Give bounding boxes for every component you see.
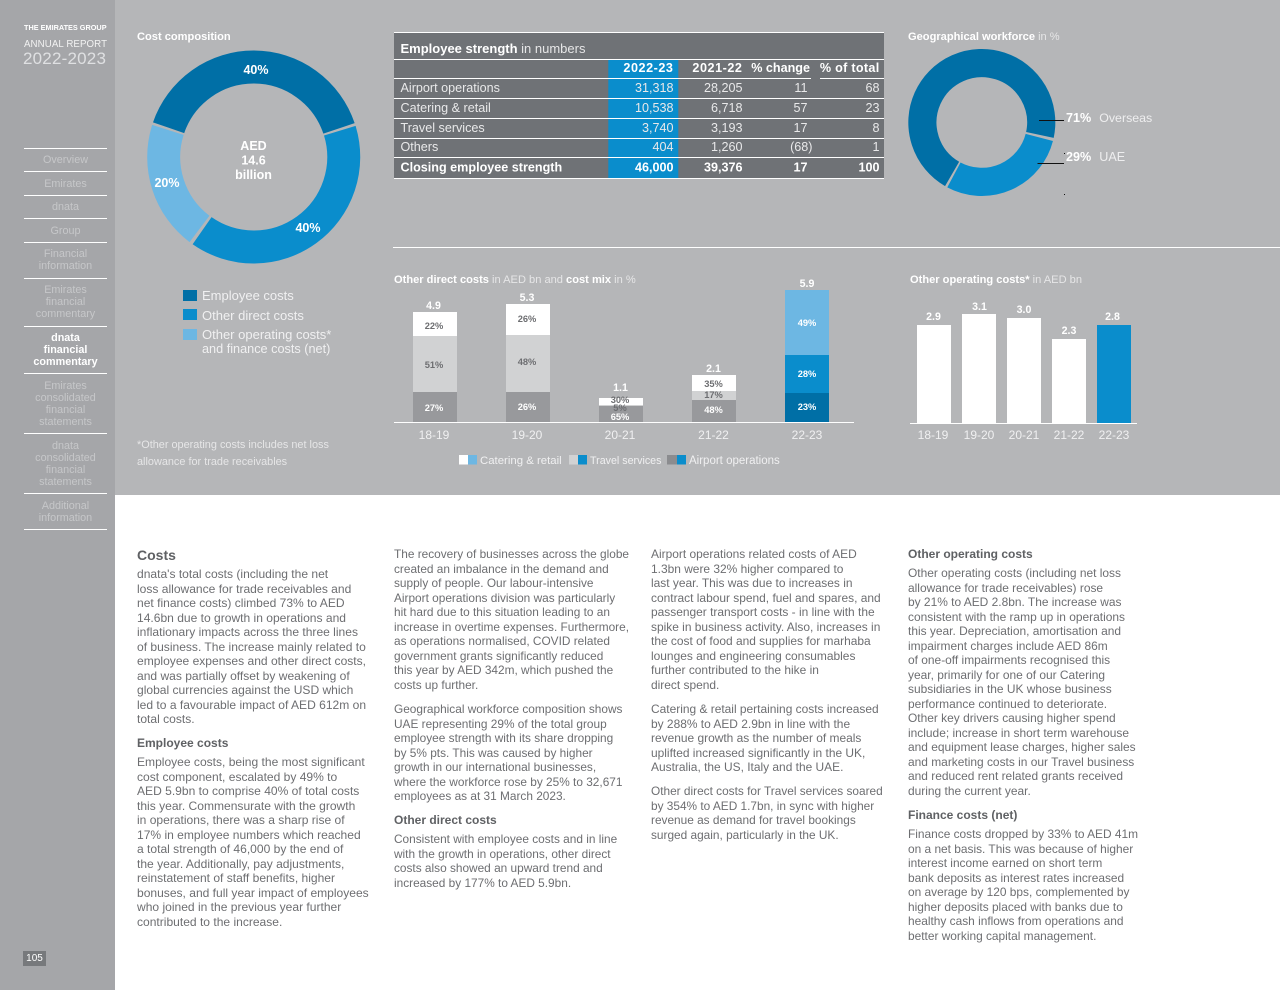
text: costs overview — [137, 567, 366, 726]
text: recovery of businesses: hit hard due to this situation leading to an — [394, 605, 610, 619]
nav: additional information: information — [39, 512, 92, 524]
bar 20-21 — [599, 382, 643, 422]
text: other operating costs: include; increase in short term warehouse — [908, 726, 1129, 740]
text: employee costs: in operations, there was a sharp rise of — [137, 813, 345, 827]
text: other operating costs: and reduced rent related grants received — [908, 769, 1123, 783]
nav: dnata consolidated financial statements — [35, 440, 96, 488]
cost composition donut: 40% — [295, 221, 321, 235]
bar 22-23: 28% — [798, 369, 817, 379]
page number — [23, 951, 46, 966]
x axis labels: 19-20 — [512, 428, 543, 442]
text: travel services costs: revenue as demand for travel bookings — [651, 813, 856, 827]
table row: others: Others — [400, 140, 438, 154]
table row: others: 1,260 — [711, 140, 742, 154]
text: recovery of businesses: Airport operations division was particularly — [394, 590, 615, 604]
text: other operating costs: Other key drivers causing higher spend — [908, 711, 1116, 725]
nav: dnata financial commentary (active): financial — [44, 344, 87, 356]
heading: cost composition: Cost composition — [137, 31, 231, 43]
nav: emirates consolidated financial statements — [35, 380, 96, 428]
table row: closing employee strength: 100 — [858, 160, 880, 174]
table row: travel services — [400, 121, 880, 135]
text: catering and retail costs — [651, 702, 879, 774]
nav: dnata consolidated financial statements: consolidated — [35, 452, 96, 464]
text: costs overview: of business. The increase mainly related to — [137, 640, 366, 654]
sidebar — [0, 0, 115, 990]
text: employee costs: this year. Commensurate with the growth — [137, 798, 355, 812]
heading: costs: Costs — [137, 547, 176, 563]
nav: emirates financial commentary — [36, 284, 95, 320]
table row: others: (68) — [790, 140, 812, 154]
text: recovery of businesses: as operations normalised, COVID related — [394, 634, 610, 648]
text: costs overview: 14.6bn due to growth in operations and — [137, 610, 346, 624]
bar chart legend: Travel services — [590, 455, 661, 467]
other operating costs bar chart — [910, 274, 1137, 442]
text: employee costs: reinstatement of staff benefits, higher — [137, 871, 335, 885]
cost composition donut: 40% — [243, 63, 269, 77]
text: employee costs: the year. Additionally, pay adjustments, — [137, 856, 344, 870]
heading: other operating costs: Other operating costs* in AED bn — [910, 274, 1082, 286]
table row: airport operations: 31,318 — [635, 81, 674, 95]
table row: airport operations: 11 — [794, 81, 808, 95]
table header row: 2022-23 — [623, 61, 674, 75]
text: other operating costs: and equipment lease charges, higher sales — [908, 740, 1136, 754]
text: employee costs: Employee costs, being the most significant — [137, 755, 365, 769]
bar 19-20 — [506, 292, 550, 422]
bar 21-22 — [692, 363, 736, 422]
text: airport operations costs: contract labour spend, fuel and spares, and — [651, 590, 881, 604]
text: geographical workforce composition: UAE representing 29% of the total group — [394, 716, 607, 730]
nav: dnata financial commentary (active) — [33, 332, 98, 368]
nav: dnata: dnata — [52, 201, 79, 213]
bar values: 3.0 — [1017, 304, 1031, 316]
text: geographical workforce composition: employee strength with its share dropping — [394, 731, 613, 745]
bar values: 3.1 — [972, 301, 987, 313]
text: geographical workforce composition: where the workforce rose by 25% to 32,671 — [394, 774, 622, 788]
heading: other direct costs: Other direct costs in AED bn and cost mix in % — [394, 274, 636, 286]
bar 20-21: 65% — [611, 412, 630, 422]
text: geographical workforce composition: growth in our international businesses, — [394, 760, 596, 774]
text: other operating costs: by 21% to AED 2.8bn. The increase was — [908, 595, 1121, 609]
text: other operating costs — [908, 566, 1136, 798]
table row: catering and retail: Catering & retail — [400, 101, 491, 115]
x axis labels — [419, 428, 823, 442]
table row: travel services: 17 — [793, 121, 808, 135]
cost composition legend: Other direct costs — [202, 308, 304, 323]
text: travel services costs: by 354% to AED 1.7bn, in sync with higher — [651, 798, 874, 812]
table row: travel services: 3,740 — [642, 121, 674, 135]
text: costs overview: inflationary impacts across the three lines — [137, 625, 358, 639]
heading: employee costs: Employee costs — [137, 736, 228, 750]
text: finance costs: bank deposits as interest rates increased — [908, 870, 1124, 884]
nav: overview: Overview — [43, 154, 88, 166]
text: costs overview: and was partially offset by weakening of — [137, 668, 350, 682]
text: costs overview: led to a favourable impact of AED 612m on — [137, 698, 366, 712]
table row: others: 1 — [872, 140, 880, 154]
text: catering and retail costs: by 288% to AED 2.9bn in line with the — [651, 716, 850, 730]
text: recovery of businesses: government grants significantly reduced — [394, 648, 603, 662]
text: costs overview: global currencies against the USD which — [137, 683, 353, 697]
cost composition donut — [137, 31, 344, 247]
text: travel services costs: Other direct costs for Travel services soared — [651, 784, 883, 798]
text: other operating costs: Other operating costs (including net loss — [908, 566, 1121, 580]
bar 18-19: 4.9 — [426, 300, 441, 312]
text: recovery of businesses: increase in overtime expenses. Furthermore, — [394, 620, 629, 634]
bar chart legend: Airport operations — [689, 455, 780, 467]
x axis labels — [918, 428, 1130, 442]
bar 18-19: 27% — [425, 403, 444, 413]
text: finance costs: better working capital management. — [908, 928, 1096, 942]
text: other direct costs: increased by 177% to AED 5.9bn. — [394, 876, 571, 890]
cost composition donut: 20% — [154, 176, 180, 190]
text: other operating costs: during the current year. — [908, 784, 1031, 798]
nav: dnata financial commentary (active): commentary — [33, 356, 98, 368]
text: costs overview: net finance costs) climbed 73% to AED — [137, 596, 345, 610]
nav: emirates financial commentary: commentary — [36, 308, 95, 320]
bar 18-19: 22% — [425, 321, 444, 331]
bar 19-20: 26% — [518, 314, 537, 324]
x axis labels: 18-19 — [419, 428, 450, 442]
text: costs overview: employee expenses and other direct costs, — [137, 654, 366, 668]
text: other operating costs: impairment charges include AED 86m — [908, 638, 1108, 652]
cost composition legend — [183, 288, 331, 356]
text: airport operations costs: lounges and engineering consumables — [651, 648, 855, 662]
text: other direct costs — [394, 832, 617, 890]
nav: group: Group — [50, 225, 80, 237]
text: finance costs: higher deposits placed with banks due to — [908, 900, 1123, 914]
navigation menu — [24, 148, 107, 530]
nav: financial information — [39, 248, 92, 272]
table row: closing employee strength — [400, 160, 880, 174]
text: other direct costs: Consistent with employee costs and in line — [394, 832, 617, 846]
text: airport operations costs: passenger transport costs - in line with the — [651, 605, 875, 619]
table row: catering and retail: 10,538 — [635, 101, 674, 115]
nav: emirates consolidated financial statements: statements — [39, 416, 92, 428]
text: catering and retail costs: Australia, the US, Italy and the UAE. — [651, 760, 843, 774]
table row: airport operations: 68 — [865, 81, 880, 95]
table row: travel services: Travel services — [400, 121, 485, 135]
heading: geographical workforce: Geographical workforce in % — [908, 31, 1060, 43]
table row: catering and retail — [400, 101, 880, 115]
bar values: 2.3 — [1062, 325, 1076, 337]
text: recovery of businesses: created an imbalance in the demand and — [394, 562, 609, 576]
text: finance costs: healthy cash inflows from operations and — [908, 914, 1123, 928]
geographical workforce donut — [908, 31, 1152, 195]
brand: annual report: ANNUAL REPORT — [24, 39, 107, 50]
cost composition legend: and finance costs (net) — [202, 342, 330, 356]
table header row: % of total — [820, 61, 880, 75]
charts panel — [115, 0, 1280, 495]
text: employee costs: who joined in the previous year further — [137, 900, 341, 914]
cost composition legend: Other operating costs* — [202, 327, 331, 342]
donut centre total: AED — [240, 139, 267, 153]
text: employee costs: cost component, escalated by 49% to — [137, 770, 337, 784]
nav: emirates: Emirates — [44, 178, 87, 190]
table header row: % change — [751, 61, 810, 75]
text: recovery of businesses: The recovery of businesses across the globe — [394, 547, 629, 561]
heading: finance costs: Finance costs (net) — [908, 808, 1017, 822]
nav: financial information: Financial — [44, 248, 87, 260]
heading: other operating costs: Other operating costs — [908, 547, 1033, 561]
text: other operating costs: performance continued to deteriorate. — [908, 696, 1107, 710]
bar 19-20: 5.3 — [520, 292, 534, 304]
bar 21-22: 17% — [704, 390, 724, 400]
bar 22-23 — [785, 278, 829, 422]
x axis labels: 20-21 — [605, 428, 636, 442]
text: finance costs: Finance costs dropped by 33% to AED 41m — [908, 827, 1138, 841]
text: employee costs: contributed to the increase. — [137, 914, 282, 928]
nav: emirates financial commentary: financial — [46, 296, 85, 308]
text: employee costs: 17% in employee numbers which reached — [137, 828, 361, 842]
text: airport operations costs: further contributed to the hike in — [651, 663, 819, 677]
text: finance costs: interest income earned on short term — [908, 856, 1102, 870]
text: other operating costs: of one-off impairments recognised this — [908, 653, 1110, 667]
table title: Employee strength in numbers — [400, 41, 586, 56]
bar 21-22: 2.1 — [706, 363, 721, 375]
other direct costs stacked bar chart — [394, 274, 854, 467]
nav: emirates consolidated financial statements: consolidated — [35, 392, 96, 404]
nav: dnata consolidated financial statements: financial — [46, 464, 85, 476]
employee strength table — [394, 32, 884, 179]
bar 22-23: 5.9 — [800, 278, 814, 290]
text: airport operations costs: last year. This was due to increases in — [651, 576, 852, 590]
text: geographical workforce composition: Geographical workforce composition shows — [394, 702, 622, 716]
bar 18-19 — [413, 300, 457, 422]
text: airport operations costs: 1.3bn were 32% higher compared to — [651, 562, 843, 576]
table row: airport operations: 28,205 — [704, 81, 742, 95]
table row: catering and retail: 6,718 — [711, 101, 742, 115]
table row: closing employee strength: 17 — [793, 160, 808, 174]
text: airport operations costs: direct spend. — [651, 678, 719, 692]
bar 21-22: 35% — [704, 379, 724, 389]
text: costs overview: dnata's total costs (including the net — [137, 567, 328, 581]
text: recovery of businesses: this year by AED 342m, which pushed the — [394, 663, 613, 677]
text: other operating costs: consistent with the ramp up in operations — [908, 610, 1125, 624]
donut centre total — [235, 139, 272, 182]
x axis labels: 20-21 — [1009, 428, 1040, 442]
brand: report years: 2022-2023 — [23, 49, 106, 68]
text: recovery of businesses: costs up further. — [394, 678, 478, 692]
text: geographical workforce composition — [394, 702, 622, 803]
footnote — [137, 439, 329, 468]
table row: travel services: 8 — [872, 121, 880, 135]
text: employee costs: bonuses, and full year impact of employees — [137, 886, 369, 900]
text: catering and retail costs: Catering & retail pertaining costs increased — [651, 702, 879, 716]
text: catering and retail costs: uplifted increased significantly in the UK, — [651, 746, 865, 760]
text: finance costs: on average by 120 bps, complemented by — [908, 885, 1129, 899]
bar 22-23: 23% — [798, 402, 817, 412]
bar 20-21: 5% — [613, 403, 627, 413]
bar 20-21: 1.1 — [613, 382, 628, 394]
footnote: *Other operating costs includes net loss — [137, 439, 329, 451]
table row: airport operations: Airport operations — [400, 81, 500, 95]
footnote: allowance for trade receivables — [137, 456, 288, 468]
text: other operating costs: allowance for trade receivables) rose — [908, 580, 1103, 594]
label: UAE share: 29% UAE — [1066, 150, 1125, 164]
x axis labels: 18-19 — [918, 428, 949, 442]
text: other direct costs: costs also showed an upward trend and — [394, 861, 603, 875]
table row: catering and retail: 57 — [793, 101, 808, 115]
table row: others — [400, 140, 880, 154]
bar 18-19: 51% — [425, 360, 444, 370]
bar values: 2.8 — [1105, 311, 1120, 323]
label: overseas share: 71% Overseas — [1066, 111, 1152, 125]
bar chart legend — [459, 455, 780, 467]
text: employee costs: a total strength of 46,000 by the end of — [137, 842, 343, 856]
nav: emirates consolidated financial statements: financial — [46, 404, 85, 416]
heading: other direct costs: Other direct costs — [394, 813, 497, 827]
text: recovery of businesses — [394, 547, 629, 692]
nav: emirates consolidated financial statements: Emirates — [44, 380, 87, 392]
table row: closing employee strength: 46,000 — [635, 160, 674, 174]
text: geographical workforce composition: employees as at 31 March 2023. — [394, 789, 566, 803]
nav: additional information: Additional — [42, 500, 89, 512]
bar 21-22: 48% — [704, 405, 724, 415]
bar 20-21: 30% — [611, 395, 630, 405]
brand: the emirates group: THE EMIRATES GROUP — [24, 23, 107, 32]
text: airport operations costs: spike in business activity. Also, increases in — [651, 620, 880, 634]
bar values: 2.9 — [926, 311, 941, 323]
text: recovery of businesses: supply of people. Our labour-intensive — [394, 576, 594, 590]
x axis labels: 21-22 — [698, 428, 729, 442]
text: finance costs — [908, 827, 1138, 942]
bar 22-23: 49% — [798, 318, 817, 328]
nav: dnata consolidated financial statements: dnata — [52, 440, 79, 452]
bar 19-20: 48% — [518, 357, 537, 367]
bar values — [926, 301, 1120, 337]
text: costs overview: loss allowance for trade receivables and — [137, 582, 351, 596]
text: other operating costs: subsidiaries in the UK whose business — [908, 682, 1112, 696]
cost composition legend: Employee costs — [202, 288, 294, 303]
table row: airport operations — [400, 81, 880, 95]
text: airport operations costs — [651, 547, 881, 692]
text: costs overview: total costs. — [137, 712, 195, 726]
table header row — [623, 61, 880, 75]
bar chart legend: Catering & retail — [480, 455, 562, 467]
nav: dnata financial commentary (active): dnata — [51, 332, 80, 344]
nav: additional information — [39, 500, 92, 524]
text: employee costs: AED 5.9bn to comprise 40% of total costs — [137, 784, 359, 798]
donut centre total: billion — [235, 168, 272, 182]
text: other operating costs: this year. Depreciation, amortisation and — [908, 624, 1121, 638]
x axis labels: 19-20 — [964, 428, 995, 442]
table row: closing employee strength: 39,376 — [704, 160, 742, 174]
text: travel services costs: surged again, particularly in the UK. — [651, 828, 839, 842]
table row: others: 404 — [652, 140, 674, 154]
text: airport operations costs: Airport operations related costs of AED — [651, 547, 857, 561]
table header row: 2021-22 — [692, 61, 742, 75]
table row: closing employee strength: Closing employee strength — [400, 160, 562, 174]
text: geographical workforce composition: by 5% pts. This was caused by higher — [394, 746, 593, 760]
nav: financial information: information — [39, 260, 92, 272]
table row: travel services: 3,193 — [711, 121, 742, 135]
text: other operating costs: year, primarily for one of our Catering — [908, 668, 1105, 682]
text: employee costs — [137, 755, 369, 928]
text: travel services costs — [651, 784, 883, 842]
nav: emirates financial commentary: Emirates — [44, 284, 87, 296]
text: other operating costs: and marketing costs in our Travel business — [908, 754, 1134, 768]
donut centre total: 14.6 — [241, 154, 266, 168]
x axis labels: 21-22 — [1054, 428, 1085, 442]
nav: dnata consolidated financial statements: statements — [39, 476, 92, 488]
page number: 105 — [26, 953, 43, 964]
text: other direct costs: with the growth in operations, other direct — [394, 846, 611, 860]
x axis labels: 22-23 — [792, 428, 823, 442]
text: airport operations costs: the cost of food and supplies for marhaba — [651, 634, 871, 648]
bar 19-20: 26% — [518, 402, 537, 412]
x axis labels: 22-23 — [1099, 428, 1130, 442]
text: finance costs: on a net basis. This was because of higher — [908, 842, 1133, 856]
table row: catering and retail: 23 — [865, 101, 880, 115]
text: catering and retail costs: revenue growth as the number of meals — [651, 731, 861, 745]
